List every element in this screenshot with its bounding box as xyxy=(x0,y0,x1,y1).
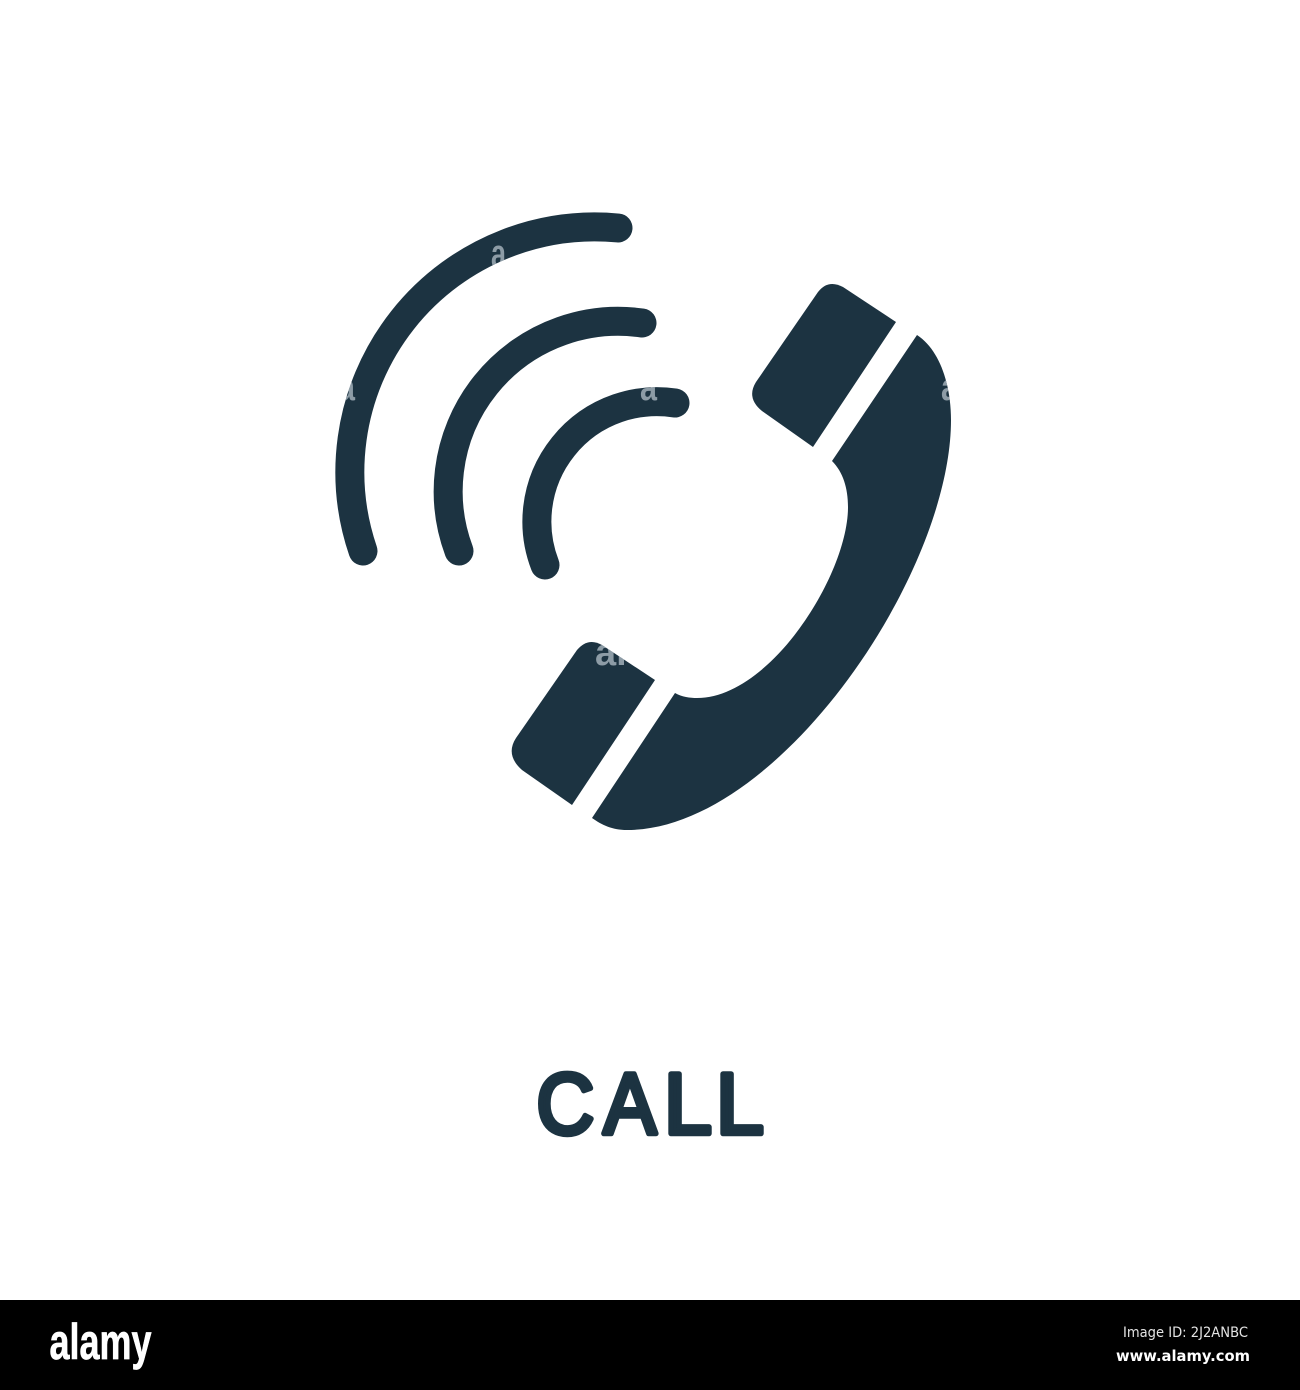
watermark fragments: al xyxy=(595,632,627,674)
icon: handset top cap xyxy=(752,284,896,447)
icon: handset bottom cap xyxy=(512,642,655,805)
footer bar xyxy=(0,1300,1300,1390)
watermark fragments: a xyxy=(640,367,658,409)
title: CALL: L xyxy=(716,1056,764,1152)
website url: www.alamy.com xyxy=(1116,1347,1250,1365)
title: CALL xyxy=(536,1055,764,1152)
icon: handset body xyxy=(592,335,951,830)
watermark fragments: a xyxy=(338,367,356,409)
watermark fragments: a xyxy=(491,232,507,276)
watermark fragments xyxy=(338,232,959,674)
icon: ringing phone xyxy=(350,227,951,830)
title: CALL: L xyxy=(664,1056,712,1152)
logo: alamy: alamy xyxy=(50,1314,152,1370)
image id: Image ID: 2J2ANBC xyxy=(1123,1325,1248,1341)
title: CALL: A xyxy=(604,1055,656,1152)
icon: sound wave arcs xyxy=(350,227,675,565)
watermark fragments: a xyxy=(941,367,959,409)
title: CALL: C xyxy=(536,1056,594,1152)
